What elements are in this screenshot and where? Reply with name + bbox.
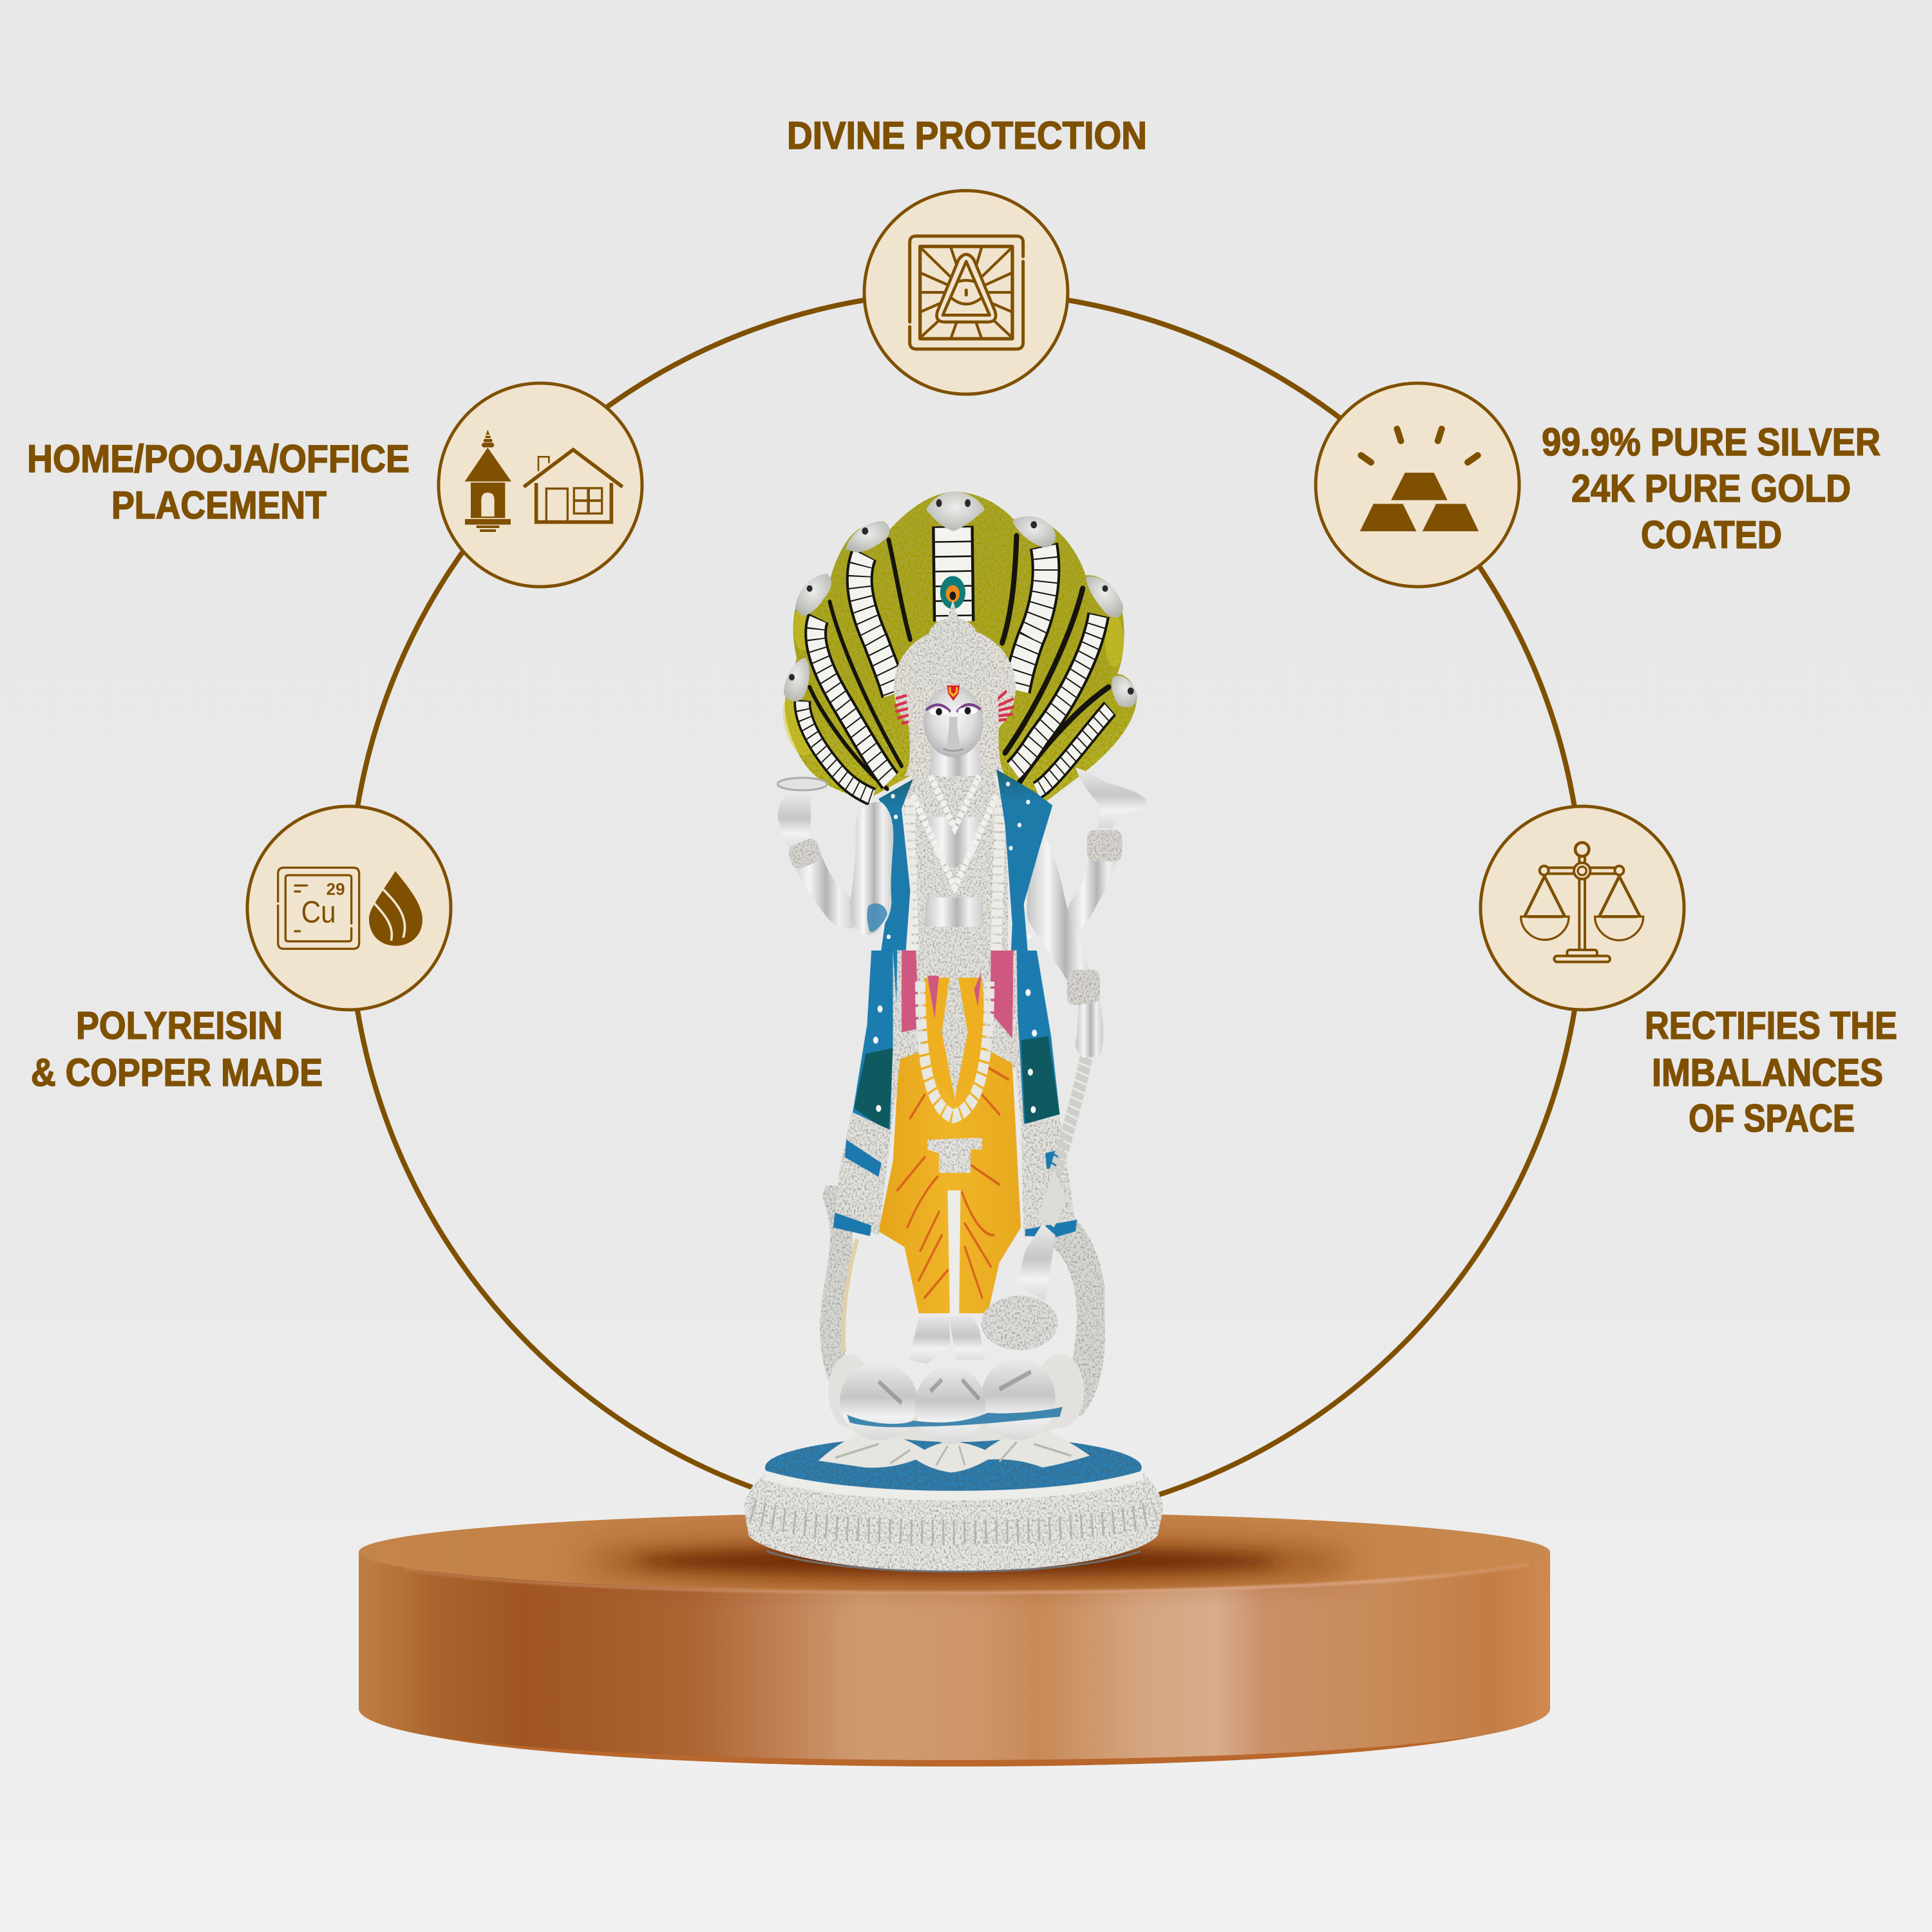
- long garlands: [910, 799, 999, 989]
- front fold: [947, 1190, 960, 1317]
- abhaya hand and left lower arm: [851, 802, 893, 935]
- icon: balance scales: [1521, 842, 1643, 962]
- right upper arm: [1067, 831, 1121, 932]
- halo: [894, 628, 1016, 746]
- base rim: [765, 1475, 1143, 1496]
- feature: divine protection: [787, 114, 1147, 394]
- blue base top: [765, 1435, 1142, 1499]
- label: & COPPER MADE: [31, 1051, 323, 1094]
- right shawl: [996, 769, 1052, 989]
- pedestal: contact shadow: [634, 1551, 1278, 1571]
- chest highlights: [925, 817, 983, 927]
- feet: [909, 1313, 985, 1364]
- mace hand: [1075, 1001, 1103, 1057]
- inner tail tint: [844, 1239, 857, 1352]
- label: PLACEMENT: [111, 484, 327, 527]
- feature: polyresin and copper: [31, 806, 451, 1094]
- left discus hand: [778, 791, 811, 851]
- serpent belly stripes: [802, 526, 1110, 797]
- lotus petals: [828, 1354, 1084, 1444]
- shawl dots: [873, 989, 1037, 1113]
- conch: [1075, 768, 1146, 828]
- right silver border: [1013, 951, 1075, 1237]
- mace head: [981, 1296, 1057, 1350]
- statue: [744, 491, 1163, 1571]
- lower shawl left: [853, 951, 897, 1130]
- label: RECTIFIES THE: [1645, 1004, 1897, 1047]
- pedestal: front rim highlight: [404, 1564, 1530, 1593]
- pedestal: top surface: [359, 1512, 1550, 1592]
- icon: gold bars: [1360, 429, 1479, 531]
- icon: copper element and resin drop: 29: [327, 879, 345, 898]
- lotus lower petals: [819, 1430, 1090, 1472]
- torso lower silver: [895, 951, 1018, 1068]
- icon: all-seeing eye pyramid: [910, 236, 1023, 349]
- pedestal: side wall: [359, 1552, 1550, 1766]
- lower shawl right: [1017, 951, 1060, 1124]
- lower shawl right teal: [1021, 1036, 1060, 1124]
- label: IMBALANCES: [1652, 1051, 1883, 1094]
- peacock feather: [940, 576, 965, 609]
- serpent heads: [784, 491, 1137, 707]
- label: [31, 1004, 323, 1094]
- label: [1542, 421, 1880, 556]
- badge: [1481, 806, 1684, 1010]
- feature: pure silver and gold: [1316, 383, 1880, 587]
- lotus blue paint: [847, 1407, 1063, 1427]
- label: 99.9% PURE SILVER: [1542, 421, 1880, 464]
- label: [27, 437, 410, 527]
- dhoti: [878, 1050, 1021, 1313]
- badge: [247, 806, 451, 1010]
- label: 24K PURE GOLD: [1571, 467, 1851, 510]
- label: DIVINE PROTECTION: [787, 114, 1147, 157]
- ring connecting the feature icons: [349, 292, 1583, 1526]
- blue paint patch on arm: [867, 904, 887, 932]
- statue upper half: hood and torso: [777, 491, 1146, 992]
- mace shaft: [1054, 1040, 1090, 1177]
- left shawl: [876, 779, 913, 989]
- base fluting: [752, 1510, 1155, 1532]
- label: POLYREISIN: [76, 1004, 283, 1047]
- badge: [1316, 383, 1519, 587]
- left silver border: [834, 951, 900, 1235]
- lower shawl left teal: [854, 1048, 893, 1132]
- icon: copper element and resin drop: [278, 867, 422, 949]
- shawl dots: [887, 782, 1032, 939]
- feature: rectifies imbalances of space: [1481, 806, 1897, 1140]
- lotus bowl: [840, 1387, 1070, 1442]
- lower right arm: [1027, 831, 1097, 992]
- serpent tails: [831, 1196, 1092, 1405]
- feature: home pooja office placement: [27, 383, 642, 587]
- badge: [439, 383, 642, 587]
- necklaces: [913, 776, 996, 887]
- left bracelet: [787, 837, 822, 871]
- left blue bands: [833, 1140, 882, 1236]
- left upper arm: [790, 842, 856, 929]
- silver base: [744, 1473, 1163, 1571]
- dhoti upper panel: [922, 978, 988, 1099]
- ear fans: [895, 691, 1014, 723]
- girdle: [927, 1138, 982, 1173]
- right bracelet: [1087, 830, 1122, 861]
- label: [1645, 1004, 1897, 1140]
- serpent hood: [785, 491, 1137, 802]
- hood black ribs: [810, 536, 1108, 789]
- bottom edge: [766, 1551, 1140, 1571]
- face: [923, 685, 983, 757]
- pedestal: bottom edge: [425, 1735, 1484, 1766]
- brighter yellow hood edges: [777, 605, 1124, 761]
- torso: [902, 776, 1008, 989]
- label: OF SPACE: [1689, 1097, 1855, 1140]
- label: HOME/POOJA/OFFICE: [27, 437, 410, 480]
- hair: [904, 687, 1005, 776]
- mace neck: [1038, 1169, 1067, 1227]
- pedestal: soft shadow: [583, 1546, 1356, 1577]
- dhoti pleats: [897, 1068, 1008, 1298]
- crown: [912, 600, 996, 690]
- label: COATED: [1641, 513, 1782, 556]
- forearm bracelet: [1067, 970, 1100, 1005]
- central pendant: [942, 951, 968, 1099]
- lotus shading marks: [878, 1372, 1031, 1403]
- right blue bands: [1025, 1150, 1077, 1237]
- statue lower half: dhoti, tails, mace and base: [744, 951, 1163, 1571]
- pedestal: [359, 1512, 1550, 1766]
- icon: copper element and resin drop: Cu: [301, 895, 336, 930]
- pink sashes: [902, 951, 1014, 1038]
- garland: [920, 981, 989, 1116]
- mace collar: [1017, 1224, 1056, 1302]
- discus: [778, 778, 827, 790]
- badge: [864, 191, 1068, 394]
- icon: temple and house: [465, 430, 623, 532]
- neck: [929, 746, 982, 781]
